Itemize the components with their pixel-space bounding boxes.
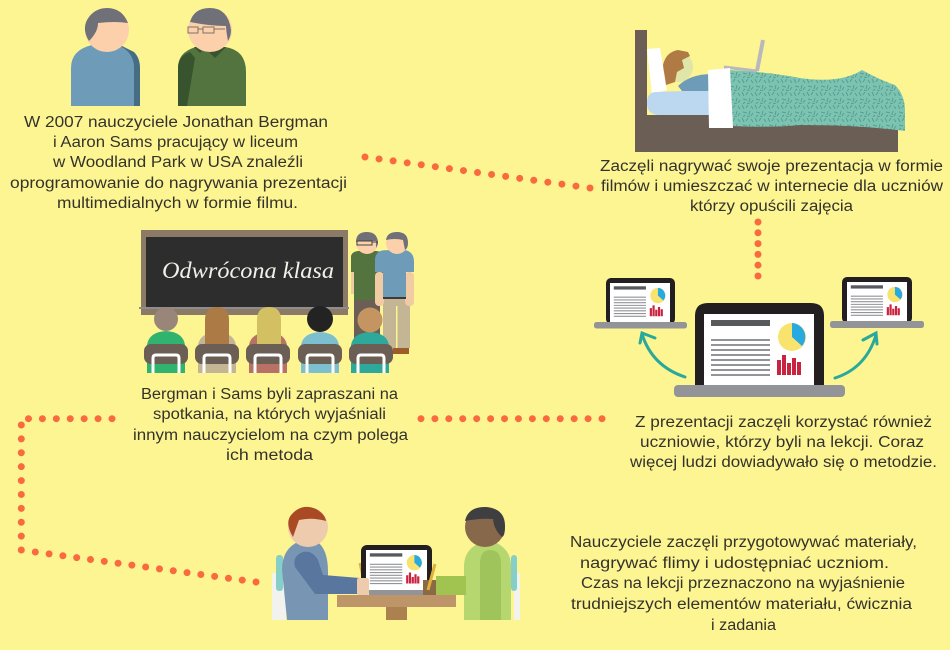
right person <box>436 507 511 620</box>
hand <box>357 578 369 595</box>
text: recording: którzy opuścili zajęcia <box>690 198 853 215</box>
student 1 <box>144 307 188 373</box>
icon: teacher in blue shirt <box>71 8 140 106</box>
table <box>337 595 456 620</box>
text: meetings: ich metoda <box>226 447 313 464</box>
text: materials and lesson time <box>570 534 917 634</box>
text: introduction: multimedialnych w formie filmu. <box>57 195 298 212</box>
tablet <box>361 545 432 595</box>
student 2 <box>195 307 239 373</box>
text: students use presentations <box>629 414 937 471</box>
arrow: to right laptop <box>835 333 877 378</box>
text: materials and lesson time: nagrywać flimy i udostępniać uczniom. <box>580 555 889 572</box>
text: introduction: i Aaron Sams pracujący w liceum <box>53 134 298 151</box>
right chair <box>511 555 520 620</box>
text: students use presentations: Z prezentacji zaczęli korzystać również <box>635 414 932 431</box>
pencil left <box>360 563 366 590</box>
text: students use presentations: uczniowie, którzy byli na lekcji. Coraz <box>640 434 924 451</box>
teacher with glasses <box>351 232 385 350</box>
text: materials and lesson time: i zadania <box>711 617 776 634</box>
text: materials and lesson time: trudniejszych elementów materiału, ćwicznia <box>571 596 912 613</box>
icon: classroom with blackboard <box>139 230 414 373</box>
blackboard: Odwrócona klasa <box>162 258 334 283</box>
icon: laptops sharing content <box>594 277 924 397</box>
left person <box>282 507 360 620</box>
icon: teacher in green shirt with glasses <box>178 8 246 106</box>
arrow: to left laptop <box>640 333 685 377</box>
text: introduction: oprogramowanie do nagrywania prezentacji <box>10 175 347 192</box>
text: introduction: w Woodland Park w USA znaleźli <box>52 154 303 171</box>
text: meetings: spotkania, na których wyjaśniali <box>153 406 386 423</box>
left chair <box>272 555 286 620</box>
arrow: dotted line from laptops to meetings <box>421 415 602 422</box>
text: meetings <box>133 386 408 464</box>
text: introduction <box>10 114 347 212</box>
teacher in blue <box>375 232 414 354</box>
text: materials and lesson time: Nauczyciele zaczęli przygotowywać materiały, <box>570 534 917 551</box>
text: materials and lesson time: Czas na lekcji przeznaczono na wyjaśnienie <box>581 575 905 592</box>
student 4 <box>298 306 342 373</box>
text: recording: filmów i umieszczać w internecie dla uczniów <box>601 178 944 195</box>
blackboard <box>139 230 349 315</box>
student 5 <box>349 308 393 373</box>
text: meetings: innym nauczycielom na czym polega <box>133 427 408 444</box>
pen holder <box>423 564 436 595</box>
arrow: dotted line from recording to laptops <box>754 222 762 276</box>
text: introduction: W 2007 nauczyciele Jonathan Bergman <box>24 114 328 131</box>
text: recording: Zaczęli nagrywać swoje prezentacja w formie <box>600 158 943 175</box>
text: meetings: Bergman i Sams byli zapraszani na <box>141 386 398 403</box>
text: students use presentations: więcej ludzi dowiadywało się o metodzie. <box>629 454 937 471</box>
arrow: dotted line from meetings to discussion <box>21 419 256 582</box>
icon: teacher and student at table <box>272 507 520 620</box>
student 3 <box>246 307 290 373</box>
arrow: dotted line from intro to recording <box>365 157 590 188</box>
text: recording <box>600 158 944 215</box>
right small laptop <box>830 277 924 328</box>
left small laptop <box>594 278 687 328</box>
centre laptop <box>674 303 845 397</box>
icon: student in bed with laptop <box>635 30 905 152</box>
